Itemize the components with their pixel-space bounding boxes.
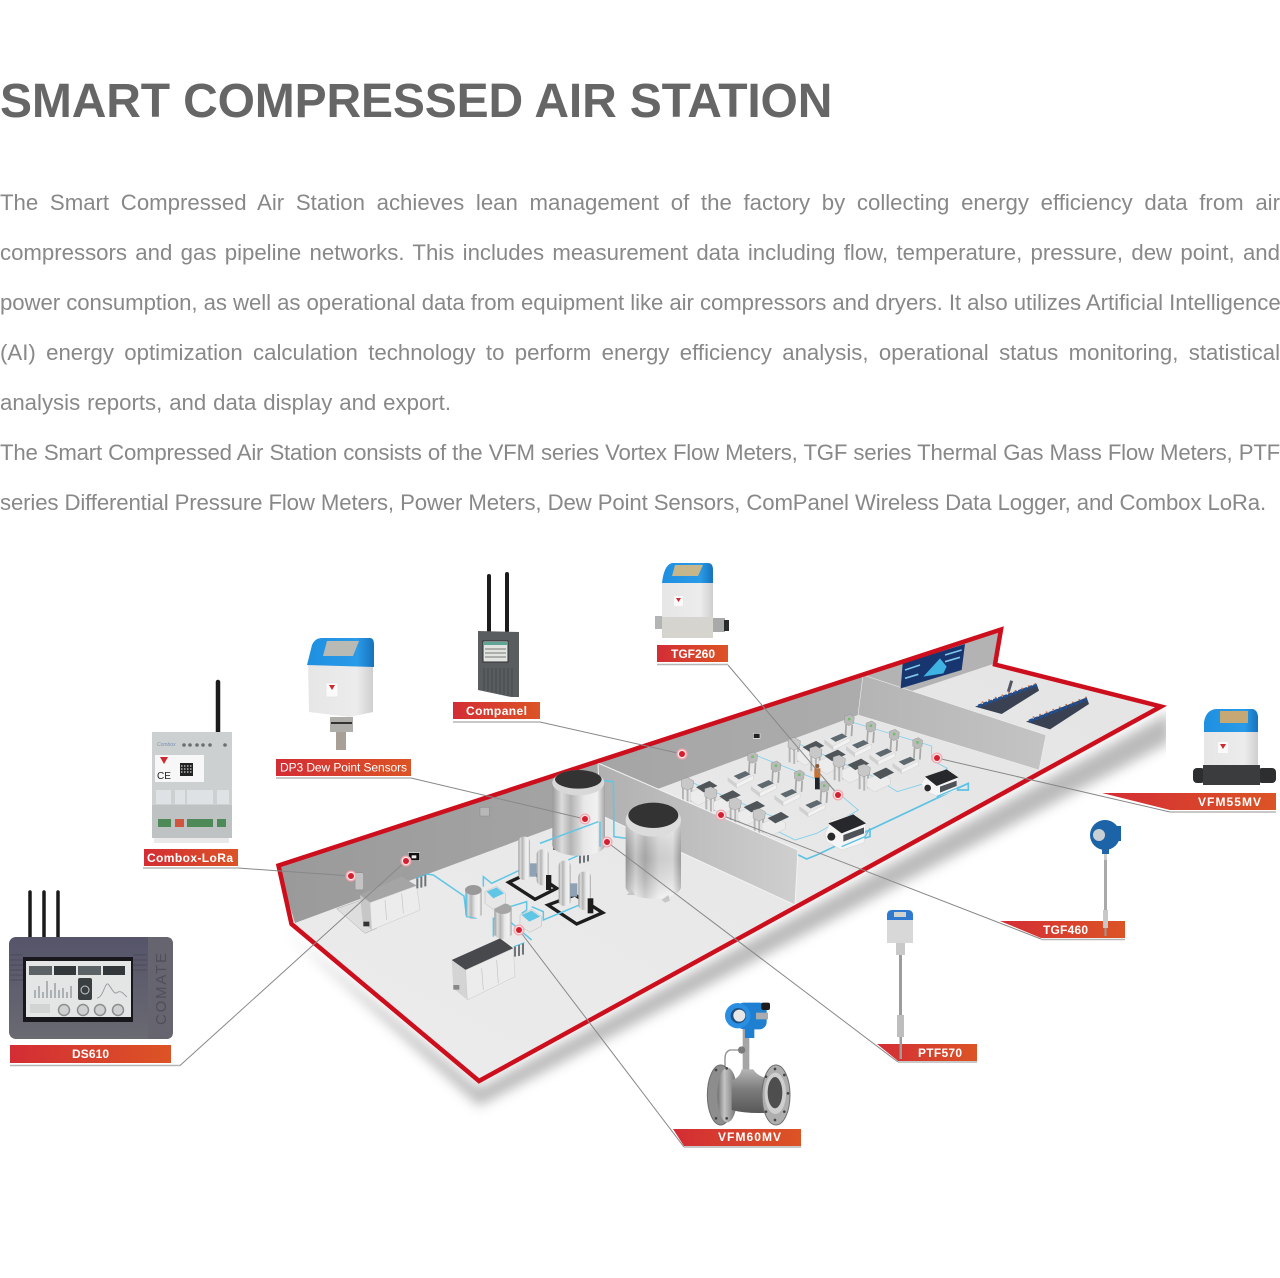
label: Companel xyxy=(453,702,540,722)
divider wall 2 xyxy=(858,675,1046,770)
title: SMART COMPRESSED AIR STATION xyxy=(0,75,832,128)
label: DS610 xyxy=(10,1045,180,1066)
label: VFM55MV xyxy=(1102,793,1276,812)
device: VFM60MV xyxy=(707,1003,790,1125)
intro text block: analysis reports, and data display and export. xyxy=(0,390,451,415)
device: PTF570 xyxy=(887,910,913,1059)
chiller 2 xyxy=(922,769,968,797)
device: DP3 dew point sensor xyxy=(307,638,374,750)
label: TGF460: TGF460 xyxy=(1043,923,1088,937)
sensor markers xyxy=(346,748,942,936)
leader: PTF570 xyxy=(607,842,898,1062)
room 3: monitoring xyxy=(901,644,1089,729)
leader: Combox-LoRa xyxy=(238,868,351,876)
intro text block: The Smart Compressed Air Station achieves lean management of the factory by collecting energy efficiency data from air xyxy=(0,190,1280,215)
label: DP3 Dew Point Sensors: DP3 Dew Point Sensors xyxy=(280,760,407,774)
leader: DS610 xyxy=(171,861,406,1066)
back wall: rooms 1 and 2 xyxy=(277,673,863,923)
compressor 1 xyxy=(360,877,420,930)
floor shadow xyxy=(285,712,1170,1106)
worker xyxy=(814,764,820,789)
red floor outline xyxy=(278,630,1161,1081)
room 2: machines and pipes xyxy=(681,714,968,859)
leader: VFM55MV xyxy=(937,758,1170,812)
label: VFM55MV: VFM55MV xyxy=(1198,795,1261,809)
big screen xyxy=(901,644,965,688)
label: VFM60MV xyxy=(673,1129,801,1147)
back wall: room 3 xyxy=(858,627,1003,715)
device: DS610: COMATE xyxy=(153,953,170,1025)
air storage tank 1 xyxy=(540,770,605,856)
label: PTF570: PTF570 xyxy=(918,1046,962,1060)
intro text block: compressors and gas pipeline networks. This includes measurement data including flow, temperature, pressure, dew point, and xyxy=(0,240,1280,265)
desiccant dryer 1 xyxy=(518,837,551,890)
small tank 2 xyxy=(494,903,512,939)
label: Combox-LoRa: Combox-LoRa xyxy=(147,851,233,865)
intro text block: power consumption, as well as operational data from equipment like air compressors and dryers. It also utilizes Artificial Intelligence xyxy=(0,290,1280,315)
device: TGF260 xyxy=(655,563,729,638)
leader: TGF260 xyxy=(728,665,838,795)
label: TGF260: TGF260 xyxy=(671,647,715,661)
station diagram xyxy=(9,563,1276,1148)
leader: DP3 xyxy=(411,778,585,819)
air storage tank 2 xyxy=(626,803,681,903)
device: Companel xyxy=(478,574,519,697)
refrigerated dryer 2 xyxy=(520,909,542,932)
machine row D xyxy=(681,777,789,836)
wall sensor xyxy=(480,807,489,816)
chiller 1 xyxy=(825,814,870,850)
dryer base frames xyxy=(509,872,603,924)
thin pipes xyxy=(690,721,947,840)
intro text block: The Smart Compressed Air Station consists of the VFM series Vortex Flow Meters, TGF series Thermal Gas Mass Flow Meters, PTF xyxy=(0,440,1280,465)
leader: Companel xyxy=(540,722,682,754)
label: TGF460 xyxy=(1000,921,1125,940)
machine row A xyxy=(824,714,923,774)
label: TGF260 xyxy=(657,645,728,664)
device: Combox-LoRa: Combox xyxy=(157,742,176,748)
filter sets xyxy=(416,836,589,957)
device: TGF460 xyxy=(1090,820,1121,936)
seating row 1 xyxy=(975,681,1039,714)
room 1: compressor room equipment xyxy=(337,781,627,1000)
main pipe xyxy=(795,783,968,859)
device: VFM55MV xyxy=(1193,709,1276,785)
leader: TGF460 xyxy=(721,815,1041,939)
label: PTF570 xyxy=(877,1044,977,1062)
label: DS610: DS610 xyxy=(72,1047,109,1061)
desiccant dryer 2 xyxy=(559,861,593,913)
label: Combox-LoRa xyxy=(143,849,238,868)
machine row C xyxy=(788,737,894,792)
display wall unit xyxy=(408,853,420,861)
divider wall 1 xyxy=(598,763,798,905)
device: DS610 xyxy=(9,892,173,1039)
combox wall unit xyxy=(355,873,364,890)
seating row 2 xyxy=(1026,697,1089,729)
label: DP3 Dew Point Sensors xyxy=(276,759,411,778)
intro text block: (AI) energy optimization calculation technology to perform energy efficiency analysis, operational status monitoring, statistical xyxy=(0,340,1280,365)
leader: VFM60MV xyxy=(519,930,684,1147)
refrigerated dryer 1 xyxy=(485,886,505,909)
label: VFM60MV: VFM60MV xyxy=(718,1130,781,1144)
wall sensor box xyxy=(753,733,760,738)
device: Combox-LoRa: CE xyxy=(157,771,171,782)
device: Combox-LoRa xyxy=(152,682,232,843)
cyan pipes xyxy=(427,781,627,940)
factory floor xyxy=(277,627,1165,1083)
compressor 2 xyxy=(452,938,515,1000)
label: Companel: Companel xyxy=(466,704,527,718)
floor plate xyxy=(337,900,377,933)
intro text block: series Differential Pressure Flow Meters, Power Meters, Dew Point Sensors, ComPanel Wireless Data Logger, and Combox LoRa. xyxy=(0,490,1266,515)
machine row B xyxy=(728,752,829,817)
small tank 1 xyxy=(465,885,482,919)
intro text block xyxy=(0,190,1280,515)
